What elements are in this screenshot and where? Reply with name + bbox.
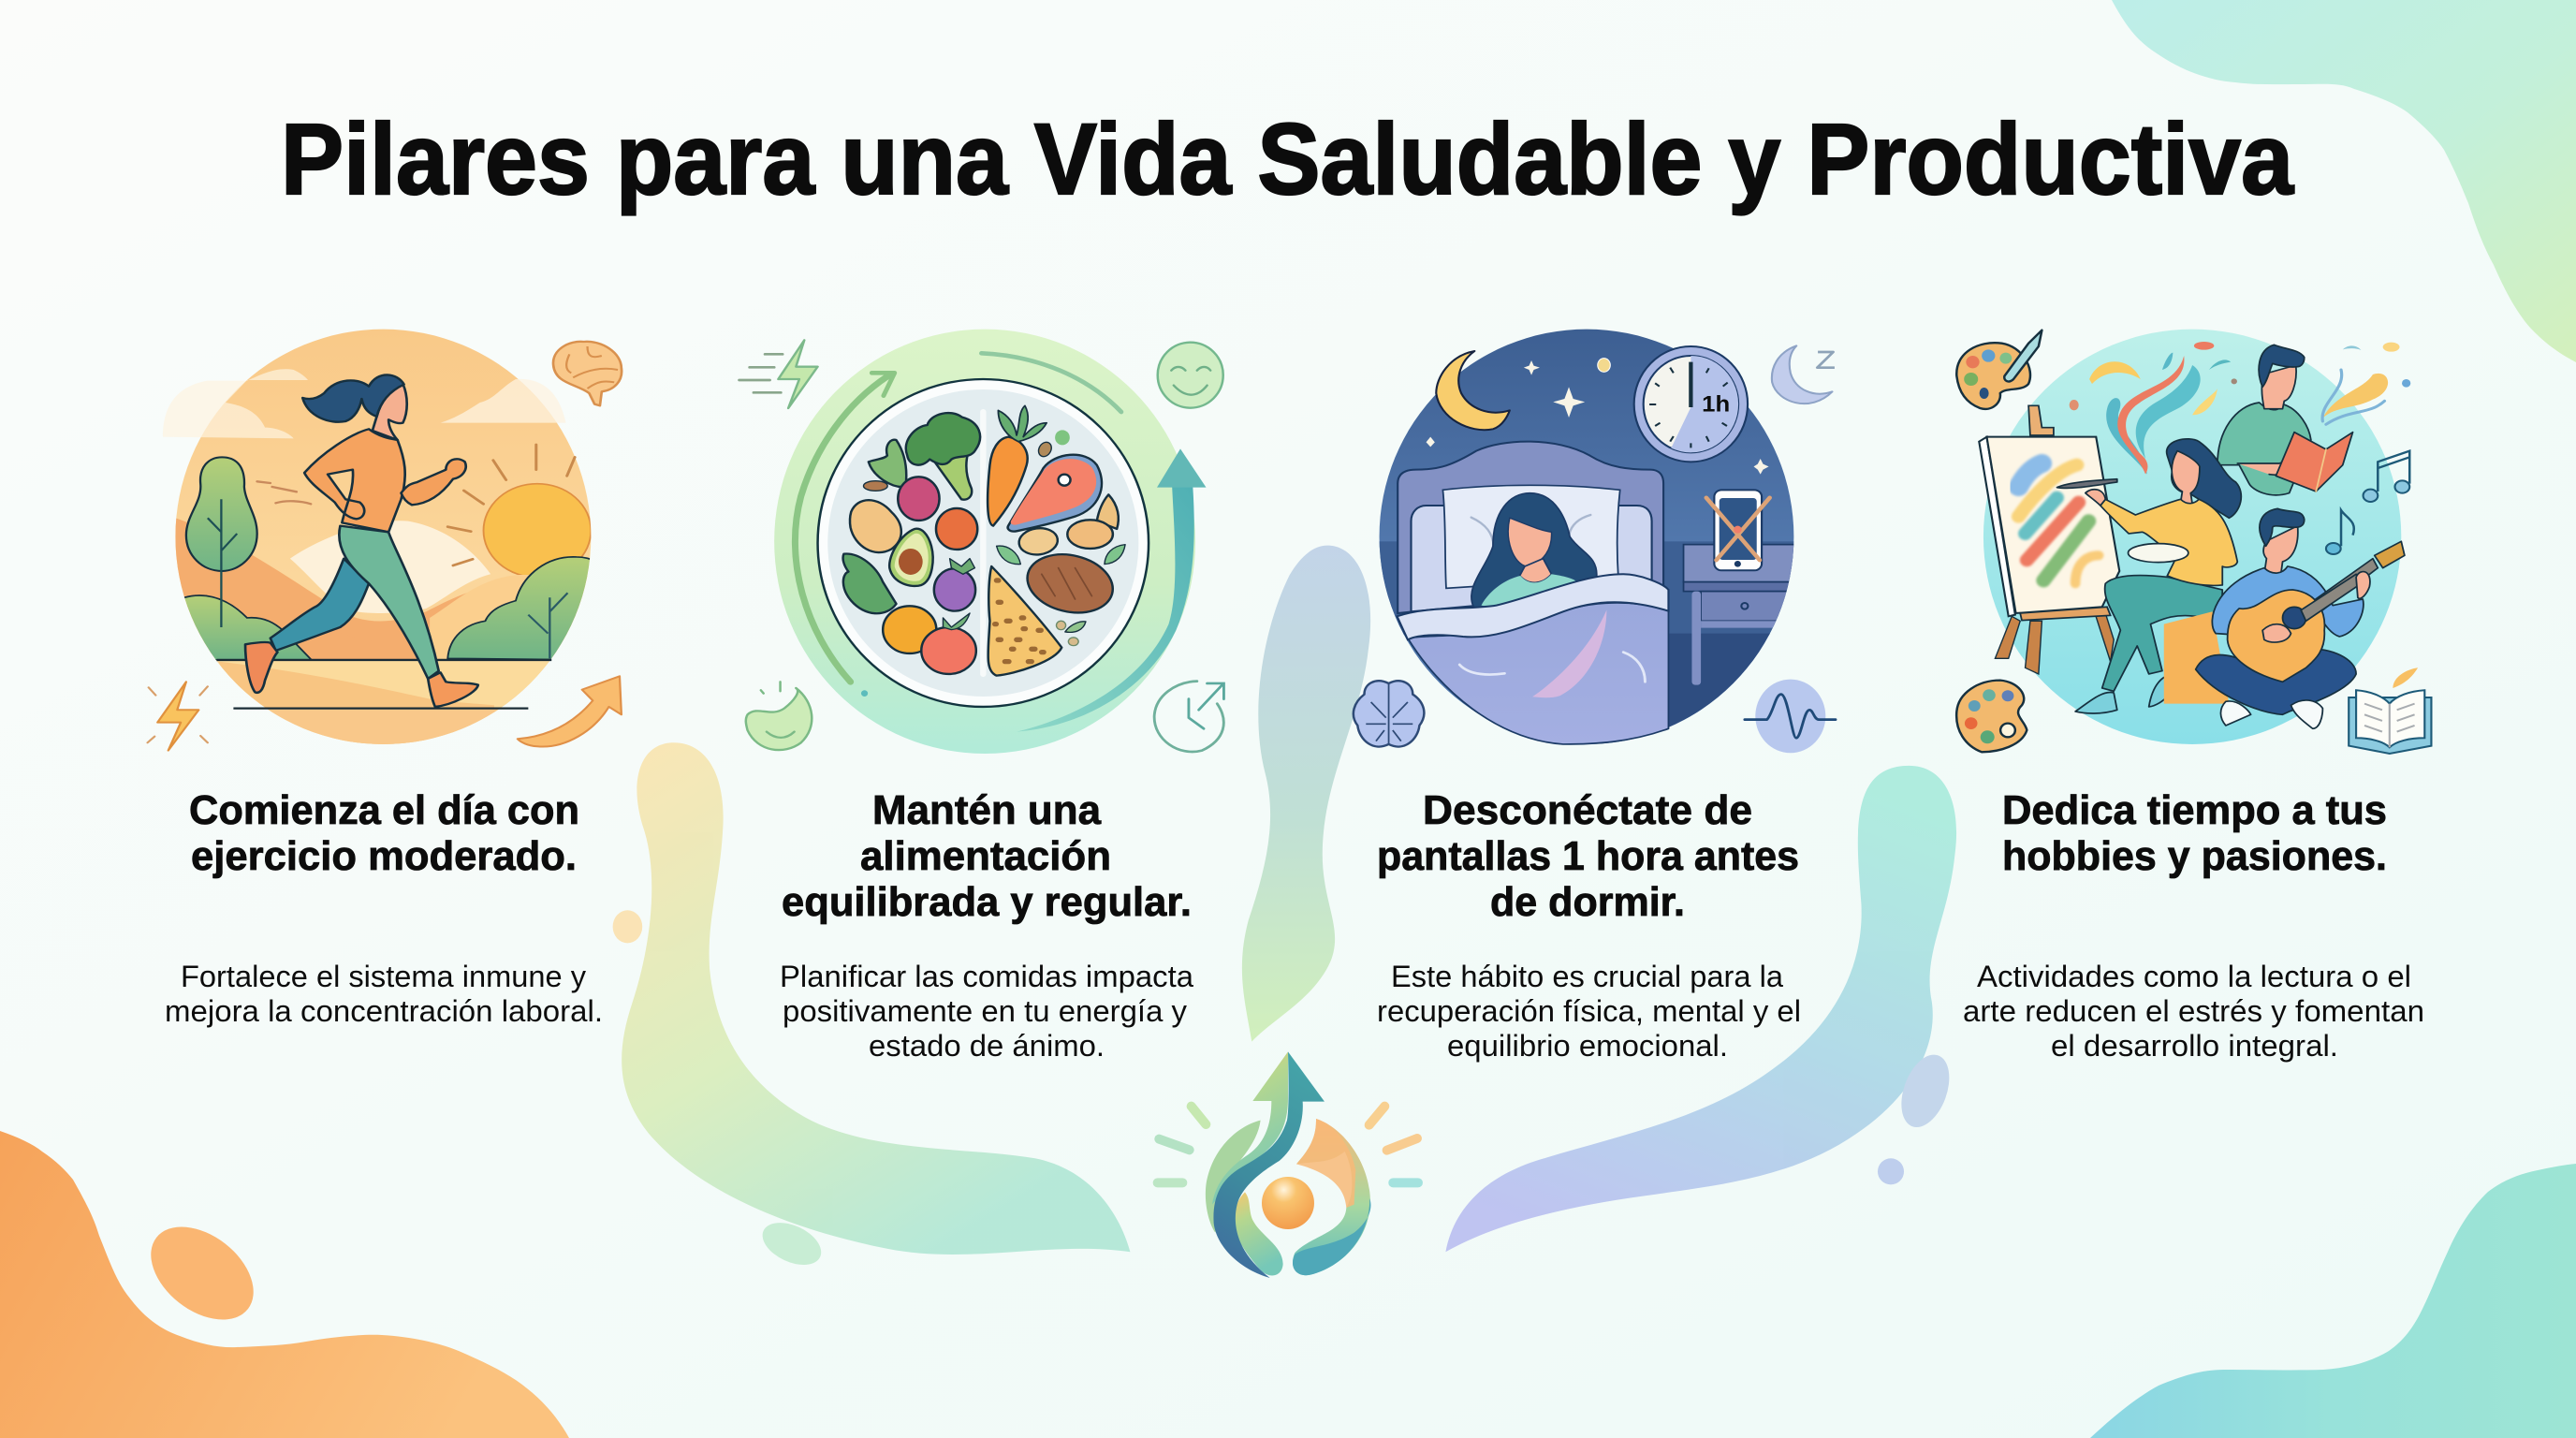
stars xyxy=(1427,360,1769,475)
decorative blob: orange oval xyxy=(134,1208,271,1339)
cycle arc top xyxy=(982,353,1121,412)
pillow xyxy=(1442,485,1620,588)
icon: sleep pulse xyxy=(1745,680,1836,753)
arrow right half and stream xyxy=(1213,1051,1325,1278)
icon: moon z xyxy=(1772,345,1835,404)
guitarist head xyxy=(2263,526,2298,574)
night sky circle xyxy=(1380,330,1793,744)
body: positivamente en tu energía y xyxy=(783,994,1187,1028)
nut 2 xyxy=(1017,526,1060,557)
landscape xyxy=(175,484,594,747)
broccoli stem xyxy=(935,452,972,500)
body xyxy=(165,960,603,1028)
decorative blob: bottom left xyxy=(0,1131,569,1438)
bedroom xyxy=(1380,541,1793,726)
orb xyxy=(1262,1177,1314,1229)
right sock xyxy=(2291,700,2322,728)
icon: brain xyxy=(553,342,622,405)
heading: Dedica tiempo a tus xyxy=(2002,787,2387,833)
radish xyxy=(898,477,940,521)
sun rays xyxy=(447,445,575,565)
painter face xyxy=(2172,451,2200,504)
inner left swoosh xyxy=(1234,1192,1283,1275)
icon: smile xyxy=(1158,343,1223,408)
icon: palette top xyxy=(1956,330,2042,409)
forward arm xyxy=(402,459,466,505)
heading xyxy=(1377,787,1799,925)
neck over body xyxy=(2301,574,2361,621)
yellow dot xyxy=(1598,359,1610,372)
guitarist legs xyxy=(2196,649,2356,714)
music notes xyxy=(2326,451,2409,554)
reader body xyxy=(2217,403,2311,495)
foods: proteins and grains half xyxy=(988,405,1125,676)
body: Este hábito es crucial para la xyxy=(1391,960,1783,993)
painter shoe 2 xyxy=(2149,675,2176,707)
paint brush xyxy=(2056,479,2117,488)
potato xyxy=(850,500,901,552)
grain speckles xyxy=(995,580,1044,662)
wall clock: 1h xyxy=(1702,391,1730,417)
body xyxy=(1377,960,1801,1063)
avocado xyxy=(889,529,933,586)
arrow left half xyxy=(1212,1051,1288,1205)
left swoosh xyxy=(1206,1121,1261,1233)
pillow creases xyxy=(1471,515,1590,546)
hair xyxy=(302,374,404,422)
foods: vegetables half xyxy=(843,413,980,674)
broccoli head xyxy=(906,413,980,465)
heading: ejercicio moderado. xyxy=(191,833,577,879)
blanket highlights xyxy=(1459,653,1645,682)
carrot leaves xyxy=(998,405,1046,442)
cloud right xyxy=(441,379,566,423)
leaf xyxy=(843,554,896,613)
body: Planificar las comidas impacta xyxy=(780,960,1193,993)
heading xyxy=(2002,787,2387,879)
plum leaf xyxy=(950,559,974,574)
cycle arc left xyxy=(795,373,895,682)
root seed xyxy=(863,481,887,491)
mattress xyxy=(1411,506,1652,611)
salmon bone xyxy=(1059,475,1071,486)
face xyxy=(373,384,407,440)
tomato xyxy=(936,508,977,550)
hair xyxy=(1471,493,1597,609)
ribbon: yellow green xyxy=(622,742,1130,1255)
greens xyxy=(869,440,906,487)
phone crossed out xyxy=(1706,490,1770,570)
small leaf xyxy=(997,546,1020,565)
palette on hand xyxy=(2129,544,2188,563)
plum xyxy=(934,568,975,611)
body: arte reducen el estrés y fomentan xyxy=(1963,994,2424,1028)
guitarist torso xyxy=(2212,566,2364,637)
pea xyxy=(1055,430,1070,445)
book xyxy=(2276,433,2353,492)
body xyxy=(1963,960,2424,1063)
heading: alimentación xyxy=(860,833,1111,879)
grains xyxy=(988,566,1061,676)
plate xyxy=(818,379,1149,707)
column text: hobbies xyxy=(1963,787,2424,1063)
guitarist hair xyxy=(2260,508,2305,546)
panel: sleep illustration xyxy=(1354,330,1836,753)
paint swirl xyxy=(2070,342,2237,475)
painter hair xyxy=(2167,439,2241,518)
nut xyxy=(1067,520,1113,549)
face xyxy=(1508,518,1552,566)
almond xyxy=(1097,494,1119,529)
heading xyxy=(189,787,579,879)
clouds xyxy=(163,369,308,438)
column text: alimentación xyxy=(780,787,1193,1063)
tree xyxy=(186,457,257,627)
heading: pantallas 1 hora antes xyxy=(1377,833,1799,879)
avocado pit xyxy=(899,549,923,575)
icon: brain folds xyxy=(566,346,618,389)
icon: brain xyxy=(1354,681,1424,747)
ribbon: central xyxy=(1242,546,1370,1042)
neck and shirt xyxy=(1481,559,1576,609)
ground lines xyxy=(216,660,551,709)
icon: clock xyxy=(1154,682,1223,752)
wall clock xyxy=(1634,346,1748,462)
painter shoe xyxy=(2075,692,2117,713)
sound hole xyxy=(2283,607,2306,629)
body: Fortalece el sistema inmune y xyxy=(181,960,586,993)
guitar head xyxy=(2375,541,2405,568)
body: estado de ánimo. xyxy=(869,1029,1105,1063)
bean xyxy=(1036,440,1054,459)
body xyxy=(780,960,1193,1063)
right swoosh xyxy=(1293,1119,1370,1275)
heading: Comienza el día con xyxy=(189,787,579,833)
rising arrow xyxy=(1017,448,1207,732)
ink swirl xyxy=(2322,343,2410,424)
aqua circle xyxy=(1983,330,2401,744)
reader hair xyxy=(2259,345,2305,387)
icon: open book xyxy=(2349,668,2431,754)
left sock xyxy=(2220,701,2251,726)
panel: nutrition illustration xyxy=(739,330,1223,754)
reader head xyxy=(2261,365,2296,409)
flowing ribbons xyxy=(613,546,1958,1273)
body: recuperación física, mental y el xyxy=(1377,994,1801,1028)
reader hand xyxy=(2237,462,2299,475)
reader figure xyxy=(2217,345,2353,495)
body: Actividades como la lectura o el xyxy=(1977,960,2411,993)
panel: exercise illustration xyxy=(148,330,622,751)
central growth logo xyxy=(1158,1051,1418,1278)
ribbon: teal periwinkle xyxy=(1445,766,1956,1252)
heading: hobbies y pasiones. xyxy=(2002,833,2387,879)
fretting hand xyxy=(2356,572,2370,598)
easel and canvas xyxy=(1979,405,2119,674)
blue base xyxy=(1293,1198,1370,1275)
title: Pilares para una Vida Saludable y Productiva xyxy=(281,102,2294,215)
icon: lightning xyxy=(148,682,208,751)
strumming hand xyxy=(2262,624,2291,642)
icon: growth arrow xyxy=(518,676,622,747)
grill marks xyxy=(1042,568,1091,599)
avocado flesh xyxy=(895,534,929,581)
back shoe xyxy=(245,642,277,693)
blanket xyxy=(1408,603,1668,744)
headboard xyxy=(1398,442,1663,613)
salmon xyxy=(1011,459,1096,525)
orange xyxy=(883,606,936,653)
blanket fold xyxy=(1397,574,1668,639)
pink streak xyxy=(1532,610,1606,697)
book spine xyxy=(2316,449,2326,492)
front shoe xyxy=(428,672,478,707)
icon: happy stomach xyxy=(746,682,812,750)
heading: Mantén una xyxy=(872,787,1102,833)
seeds xyxy=(1057,621,1078,646)
seed leaf xyxy=(1065,622,1086,632)
runner xyxy=(245,374,478,707)
guitarist figure xyxy=(2196,508,2405,728)
wind marks xyxy=(257,481,311,504)
canvas strokes xyxy=(2018,463,2099,583)
guitar neck xyxy=(2296,559,2378,624)
apple xyxy=(921,627,976,674)
decorative blob: top right xyxy=(2112,0,2576,362)
column text: ejercicio xyxy=(165,787,603,1028)
column text: sueño xyxy=(1377,787,1801,1063)
icon: palette bottom xyxy=(1956,681,2027,752)
small leaf 2 xyxy=(1105,545,1125,565)
steak xyxy=(1020,546,1120,621)
heading: de dormir. xyxy=(1490,879,1685,925)
heading xyxy=(782,787,1192,925)
moon xyxy=(1436,351,1510,430)
orange highlight xyxy=(1296,1119,1355,1208)
apple leaf xyxy=(943,613,970,630)
body: el desarrollo integral. xyxy=(2051,1029,2338,1063)
guitar body xyxy=(2228,590,2324,682)
carrot xyxy=(988,437,1028,526)
panel: hobbies illustration xyxy=(1956,330,2431,754)
icon: energy bolt xyxy=(739,340,818,408)
nightstand xyxy=(1684,545,1798,685)
torso and arm xyxy=(304,429,405,532)
heading: Desconéctate de xyxy=(1423,787,1752,833)
heading: equilibrada y regular. xyxy=(782,879,1192,925)
logo rays xyxy=(1158,1107,1418,1182)
front leg xyxy=(339,526,439,679)
droplets xyxy=(613,910,1958,1273)
scene circle xyxy=(175,330,591,744)
painter top xyxy=(2100,499,2237,585)
body: mejora la concentración laboral. xyxy=(165,994,603,1028)
decorative blob: bottom right xyxy=(2090,1164,2576,1438)
green ring xyxy=(774,330,1195,754)
box seat xyxy=(2164,611,2229,704)
painter hand xyxy=(2086,490,2105,506)
body: equilibrio emocional. xyxy=(1447,1029,1728,1063)
back leg xyxy=(271,559,369,651)
salmon skin xyxy=(1008,455,1102,532)
painter figure xyxy=(2056,439,2241,713)
painter legs xyxy=(2102,576,2222,691)
